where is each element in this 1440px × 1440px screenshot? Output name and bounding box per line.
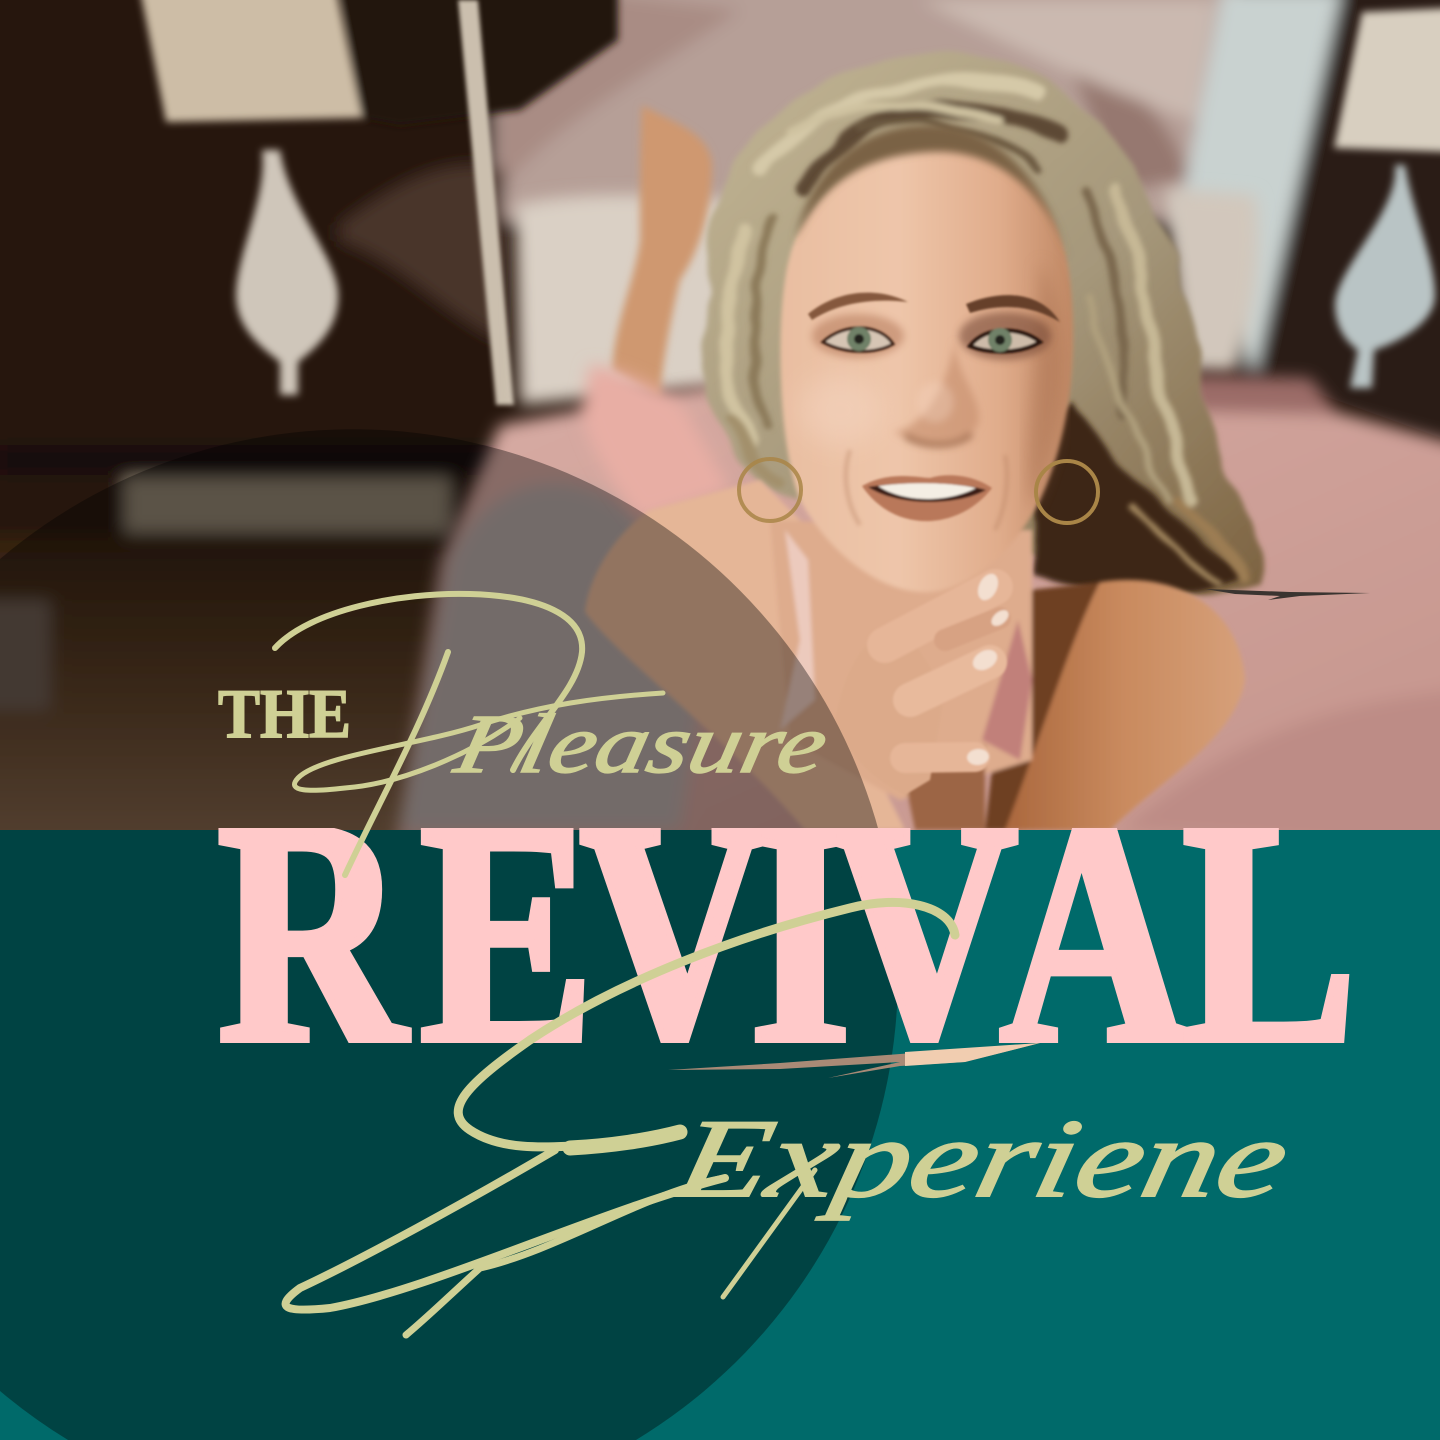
- title word: Experiene with flourishes: Experiene: [664, 1097, 1299, 1221]
- brush stroke: rose gold, below title: [668, 1043, 1040, 1078]
- cheek highlight: [802, 378, 876, 442]
- right face shadow: [1027, 260, 1063, 510]
- hair: [704, 54, 1264, 595]
- eye shadows: [812, 314, 904, 358]
- earrings: [739, 459, 1098, 523]
- floor lamp pole: [458, 0, 514, 405]
- pillows: [515, 188, 1258, 405]
- right eye: [970, 328, 1040, 352]
- title word: REVIVAL: REVIVAL: [218, 753, 1356, 1114]
- title word: Pleasure with flourishes: Pleasure: [447, 698, 836, 791]
- face: [739, 125, 1098, 592]
- left lamp: [140, 0, 618, 395]
- hairline: [794, 123, 1060, 238]
- leg and foot: [612, 105, 712, 400]
- title word: THE: THE: [218, 676, 351, 753]
- left eye: [823, 327, 893, 351]
- smile lines: [846, 450, 1007, 530]
- photo background room: [0, 0, 1440, 855]
- hand: [868, 570, 1012, 794]
- eyebrows: [808, 293, 908, 320]
- pink bed: [395, 375, 1440, 850]
- shoulders and arms: [585, 480, 1245, 830]
- title word: Pleasure with flourishes: [275, 594, 836, 875]
- title word: Experiene with flourishes: [286, 902, 1299, 1335]
- photo: woman lying on a pink bed: [0, 0, 1440, 855]
- pink trousers: [582, 365, 730, 520]
- dark translucent circle: [0, 429, 898, 1440]
- right lamp: [1334, 8, 1440, 388]
- mouth: [862, 475, 992, 521]
- nose: [893, 340, 979, 445]
- brush stroke: dark, upper right: [1205, 589, 1370, 600]
